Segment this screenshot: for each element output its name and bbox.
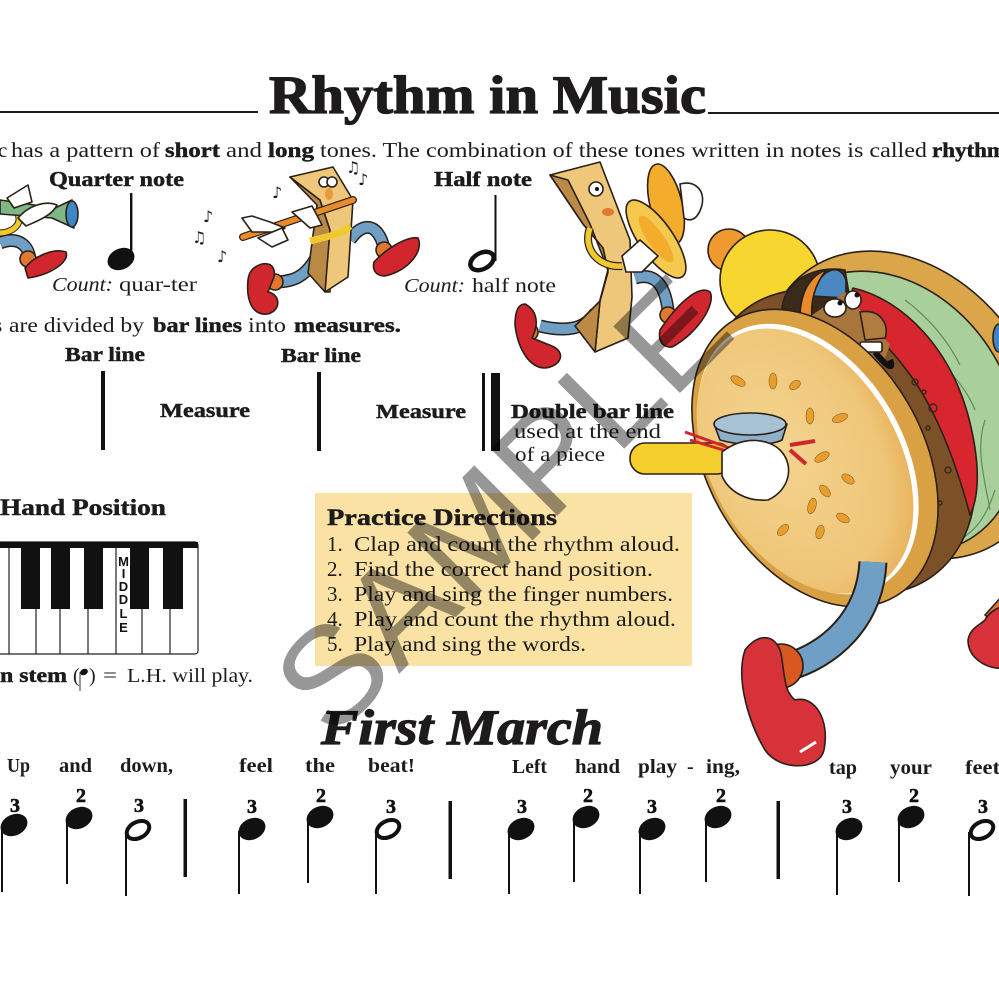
stem note: ( bbox=[73, 665, 80, 687]
finger numbers: 3 bbox=[517, 796, 527, 818]
watermark: SAMPLE: SAMPLE bbox=[245, 247, 760, 762]
quarter note count: quar-ter bbox=[119, 274, 197, 296]
stem note: ) bbox=[89, 665, 96, 687]
panel: practice directions: 4. bbox=[327, 607, 343, 631]
lyrics: - bbox=[687, 756, 694, 778]
panel: practice directions: Clap and count the rhythm aloud. bbox=[354, 532, 680, 556]
finger numbers: 2 bbox=[909, 785, 919, 807]
intro sentence: has a pattern of bbox=[11, 138, 160, 162]
panel: practice directions: Play and sing the words. bbox=[354, 632, 586, 656]
bar lines sentence: are divided by bbox=[9, 313, 145, 337]
heading: hand position: Hand Position bbox=[0, 495, 166, 520]
stem note: L.H. will play. bbox=[127, 665, 253, 687]
measure bars bbox=[184, 799, 780, 879]
illustration: trumpet fry, cropped bbox=[0, 185, 78, 278]
stem note: n stem bbox=[0, 665, 67, 687]
icon: music notes around flute fry: ♪ bbox=[203, 207, 213, 226]
keyboard diagram: L bbox=[120, 606, 128, 621]
icon: music notes around flute fry: ♫ bbox=[346, 158, 360, 177]
illustration: burger character bbox=[630, 195, 999, 766]
double bar line note bbox=[511, 401, 674, 466]
icon: half note bbox=[467, 195, 497, 274]
illustration: flute fry bbox=[242, 167, 419, 314]
keyboard diagram: D bbox=[119, 592, 128, 607]
note stems bbox=[2, 819, 969, 896]
finger numbers bbox=[10, 785, 988, 818]
quarter note count bbox=[52, 274, 197, 296]
panel: practice directions bbox=[315, 493, 692, 666]
intro sentence: long bbox=[268, 138, 315, 162]
finger numbers: 2 bbox=[316, 785, 326, 807]
lyrics: feet bbox=[965, 757, 999, 779]
lyrics: hand bbox=[575, 756, 620, 778]
stem note bbox=[0, 665, 253, 691]
title: Rhythm in Music bbox=[269, 65, 706, 125]
lyrics: ing, bbox=[706, 756, 740, 778]
lyrics: tap bbox=[829, 757, 857, 779]
keyboard diagram: E bbox=[119, 620, 128, 635]
panel: practice directions: 1. bbox=[327, 532, 343, 556]
panel: practice directions: 3. bbox=[327, 582, 343, 606]
lyrics: beat! bbox=[368, 755, 415, 777]
icon: music notes around flute fry: ♪ bbox=[272, 183, 282, 202]
intro sentence: short bbox=[165, 138, 220, 162]
quarter note heads bbox=[0, 802, 928, 844]
half note count: half note bbox=[472, 275, 556, 297]
icon: music notes around flute fry: ♪ bbox=[217, 247, 227, 266]
bar lines sentence: bar lines bbox=[153, 313, 242, 337]
lyrics: your bbox=[890, 757, 932, 779]
quarter note count: Count: bbox=[52, 274, 113, 296]
finger numbers: 2 bbox=[716, 785, 726, 807]
bar line diagram: Measure bbox=[160, 400, 250, 422]
lyrics: play bbox=[638, 756, 677, 778]
bar line diagram: Bar line bbox=[281, 345, 361, 367]
intro sentence: rhythm bbox=[932, 138, 999, 162]
lyrics bbox=[7, 755, 999, 779]
double bar line note: Double bar line bbox=[511, 401, 674, 423]
half note count bbox=[404, 275, 556, 297]
bar lines sentence: measures. bbox=[294, 313, 401, 337]
intro sentence: tones. The combination of these tones written in notes is called bbox=[320, 138, 928, 162]
icon: music notes around flute fry: ♪ bbox=[358, 170, 368, 189]
finger numbers: 3 bbox=[247, 796, 257, 818]
double bar line note: of a piece bbox=[515, 444, 605, 466]
icon: music notes around flute fry bbox=[192, 158, 368, 266]
keyboard diagram: D bbox=[119, 579, 128, 594]
finger numbers: 3 bbox=[386, 796, 396, 818]
melody notation bbox=[0, 785, 996, 896]
heading: half note: Half note bbox=[434, 167, 532, 191]
lyrics: and bbox=[59, 755, 92, 777]
panel: practice directions: 2. bbox=[327, 557, 343, 581]
keyboard diagram bbox=[0, 542, 198, 654]
half note heads bbox=[124, 816, 996, 843]
panel: practice directions: 5. bbox=[327, 632, 343, 656]
illustration: cymbal fry bbox=[515, 160, 711, 368]
panel: practice directions: Play and count the rhythm aloud. bbox=[354, 607, 676, 631]
intro sentence: and bbox=[226, 138, 263, 162]
bar line diagram: Measure bbox=[376, 401, 466, 423]
keyboard diagram: I bbox=[122, 566, 125, 581]
finger numbers: 2 bbox=[76, 785, 86, 807]
bar lines sentence: into bbox=[248, 313, 286, 337]
finger numbers: 2 bbox=[583, 785, 593, 807]
lyrics: down, bbox=[120, 755, 173, 777]
finger numbers: 3 bbox=[10, 795, 20, 817]
finger numbers: 3 bbox=[978, 796, 988, 818]
finger numbers: 3 bbox=[842, 796, 852, 818]
bar line diagram bbox=[65, 344, 500, 451]
lyrics: Left bbox=[512, 756, 547, 778]
panel: practice directions: Practice Directions bbox=[327, 505, 557, 530]
finger numbers: 3 bbox=[647, 796, 657, 818]
half note count: Count: bbox=[404, 275, 465, 297]
icon: quarter note bbox=[104, 193, 138, 274]
lyrics: the bbox=[305, 755, 335, 777]
panel: practice directions: Play and sing the finger numbers. bbox=[354, 582, 673, 606]
lyrics: Up bbox=[7, 755, 30, 777]
icon: music notes around flute fry: ♫ bbox=[192, 228, 206, 247]
song title: First March bbox=[320, 699, 603, 755]
lyrics: feel bbox=[239, 755, 273, 777]
finger numbers: 3 bbox=[134, 795, 144, 817]
stem note: = bbox=[103, 665, 117, 687]
panel: practice directions: Find the correct hand position. bbox=[354, 557, 653, 581]
intro sentence bbox=[0, 138, 999, 162]
double bar line note: used at the end bbox=[514, 421, 661, 443]
keyboard diagram: M bbox=[118, 554, 129, 569]
heading: quarter note: Quarter note bbox=[49, 167, 184, 191]
bar line diagram: Bar line bbox=[65, 344, 145, 366]
bar lines sentence bbox=[0, 313, 401, 337]
